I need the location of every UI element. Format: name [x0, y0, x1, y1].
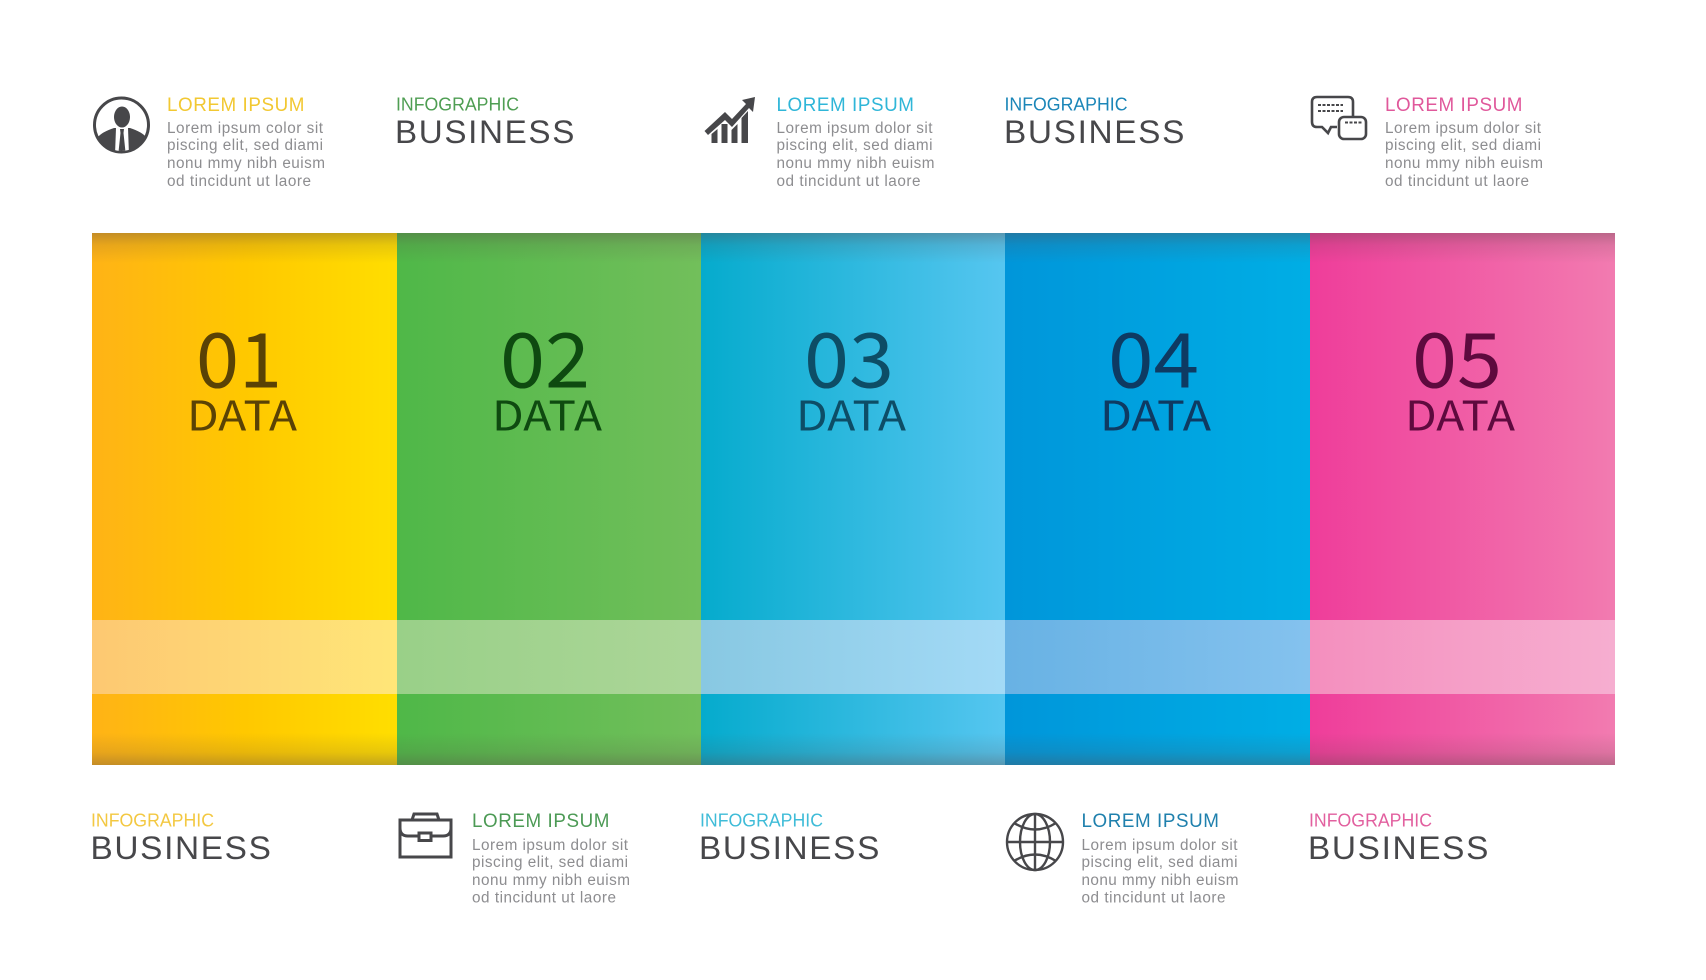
heading: business cyan: BUSINESS — [699, 830, 881, 866]
label 03: DATA — [796, 382, 906, 442]
icon: businessman — [94, 98, 148, 160]
item: lorem ipsum yellow: od tincidunt ut laore — [167, 173, 311, 190]
panel: top row text and icons — [94, 94, 1543, 190]
item: lorem ipsum cyan — [776, 94, 934, 190]
heading: business yellow: INFOGRAPHIC — [91, 810, 214, 830]
heading: business cyan — [699, 810, 881, 866]
label 03: 03 — [804, 300, 894, 410]
heading: business yellow: BUSINESS — [90, 830, 272, 866]
heading: business green: INFOGRAPHIC — [396, 94, 519, 114]
infographic canvas — [92, 96, 1615, 902]
label 02: DATA — [492, 382, 602, 442]
label 04: 04 — [1108, 300, 1199, 410]
heading: business blue: INFOGRAPHIC — [1004, 94, 1128, 114]
heading: business blue: BUSINESS — [1004, 114, 1186, 150]
item: lorem ipsum blue: piscing elit, sed diami — [1082, 854, 1238, 871]
label 01 — [187, 300, 297, 442]
item: lorem ipsum green — [472, 810, 630, 906]
item: lorem ipsum pink: Lorem ipsum dolor sit — [1385, 120, 1542, 137]
item: lorem ipsum green: piscing elit, sed diami — [472, 854, 628, 871]
item: lorem ipsum blue: LOREM IPSUM — [1082, 810, 1220, 832]
item: lorem ipsum green: LOREM IPSUM — [472, 810, 610, 832]
item: lorem ipsum cyan: nonu mmy nibh euism — [776, 155, 934, 172]
label 05: 05 — [1412, 300, 1502, 410]
label 04: DATA — [1100, 382, 1211, 442]
item: lorem ipsum pink: piscing elit, sed diami — [1385, 137, 1541, 154]
item: lorem ipsum pink — [1385, 94, 1543, 190]
item: lorem ipsum yellow: LOREM IPSUM — [167, 94, 305, 116]
label 03 — [796, 300, 906, 442]
heading: business pink: INFOGRAPHIC — [1309, 810, 1432, 830]
item: lorem ipsum green: nonu mmy nibh euism — [472, 872, 630, 889]
label 04 — [1100, 300, 1211, 442]
heading: business green: BUSINESS — [395, 114, 576, 150]
item: lorem ipsum green: od tincidunt ut laore — [472, 890, 616, 906]
icon: globe — [1007, 814, 1063, 870]
label 01: DATA — [187, 382, 297, 442]
item: lorem ipsum cyan: Lorem ipsum dolor sit — [776, 120, 933, 137]
item: lorem ipsum cyan: LOREM IPSUM — [776, 94, 914, 116]
item: lorem ipsum yellow: Lorem ipsum color sit — [167, 120, 324, 137]
item: lorem ipsum pink: nonu mmy nibh euism — [1385, 155, 1543, 172]
column 02 — [397, 233, 701, 765]
label 02: 02 — [500, 300, 590, 410]
icon: growth chart — [704, 97, 755, 143]
heading: business pink — [1308, 810, 1490, 866]
column 01 — [92, 233, 397, 765]
heading: business yellow — [90, 810, 272, 866]
panel: coloured columns — [92, 233, 1615, 765]
heading: business green — [395, 94, 576, 150]
panel: bottom row text and icons — [90, 810, 1490, 906]
label 05: DATA — [1405, 382, 1515, 442]
column 04 — [1005, 233, 1310, 765]
label 02 — [492, 300, 602, 442]
icon: speech bubbles — [1312, 97, 1366, 139]
item: lorem ipsum cyan: od tincidunt ut laore — [776, 173, 920, 190]
item: lorem ipsum blue — [1082, 810, 1238, 906]
item: lorem ipsum yellow: nonu mmy nibh euism — [167, 155, 325, 172]
item: lorem ipsum yellow: piscing elit, sed diami — [167, 137, 323, 154]
label 01: 01 — [196, 300, 282, 410]
translucent band — [92, 620, 1615, 694]
heading: business pink: BUSINESS — [1308, 830, 1490, 866]
item: lorem ipsum cyan: piscing elit, sed diami — [776, 137, 932, 154]
item: lorem ipsum blue: nonu mmy nibh euism — [1082, 872, 1238, 889]
heading: business cyan: INFOGRAPHIC — [700, 810, 823, 830]
item: lorem ipsum blue: od tincidunt ut laore — [1082, 890, 1226, 906]
icon: briefcase — [400, 814, 451, 857]
column 05 — [1310, 233, 1615, 765]
item: lorem ipsum pink: od tincidunt ut laore — [1385, 173, 1529, 190]
item: lorem ipsum blue: Lorem ipsum dolor sit — [1082, 837, 1238, 854]
column 03 — [701, 233, 1005, 765]
item: lorem ipsum yellow — [167, 94, 325, 190]
heading: business blue — [1004, 94, 1186, 150]
panel: column labels — [187, 300, 1515, 442]
label 05 — [1405, 300, 1515, 442]
item: lorem ipsum green: Lorem ipsum dolor sit — [472, 837, 629, 854]
item: lorem ipsum pink: LOREM IPSUM — [1385, 94, 1523, 116]
